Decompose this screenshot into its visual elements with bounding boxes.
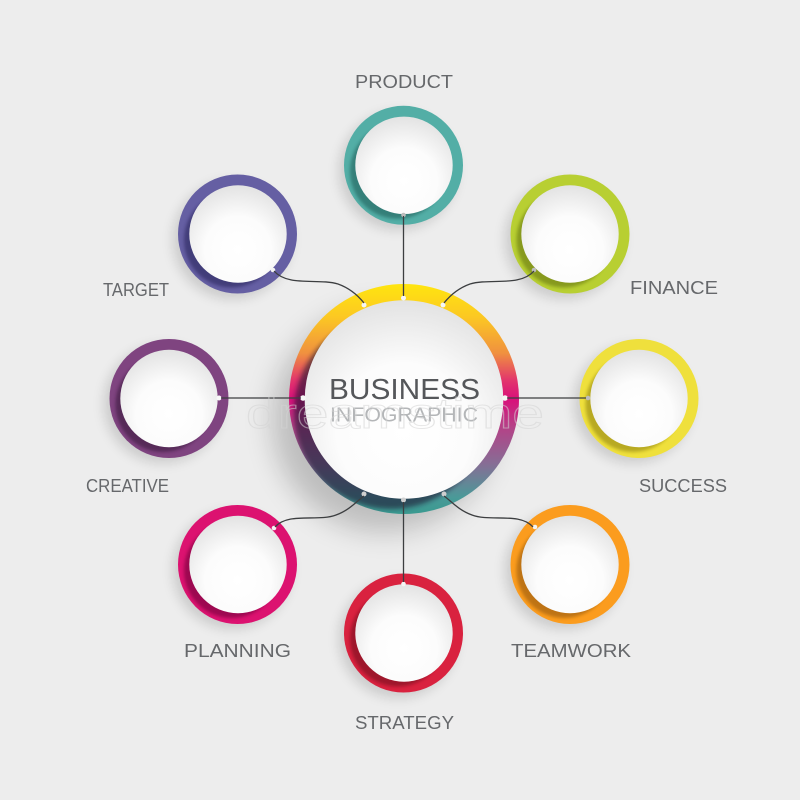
node: creative	[104, 339, 228, 463]
label: teamwork: TEAMWORK	[511, 641, 631, 661]
label: planning: PLANNING	[184, 641, 291, 661]
title: business: BUSINESS	[329, 374, 480, 406]
hub white disc	[305, 300, 503, 499]
label: strategy: STRATEGY	[355, 713, 454, 733]
hub connector dots	[300, 296, 508, 502]
node: product	[339, 106, 463, 230]
connector lines	[221, 216, 586, 582]
label: target: TARGET	[103, 280, 169, 300]
hub ring shadow	[290, 331, 466, 512]
hub gradient ring	[289, 284, 519, 514]
label: product: PRODUCT	[355, 72, 453, 92]
label: creative: CREATIVE	[86, 476, 169, 496]
node: target	[173, 174, 297, 299]
node: planning	[173, 505, 297, 629]
node: strategy	[339, 574, 463, 698]
label: finance: FINANCE	[630, 278, 718, 298]
node: teamwork	[505, 505, 630, 629]
subtitle: infographic: INFOGRAPHIC	[330, 404, 478, 426]
central hub	[272, 284, 519, 532]
watermark: dreamstime	[246, 390, 544, 438]
label: success: SUCCESS	[639, 476, 727, 496]
node: success	[574, 339, 698, 463]
node: finance	[505, 174, 630, 299]
